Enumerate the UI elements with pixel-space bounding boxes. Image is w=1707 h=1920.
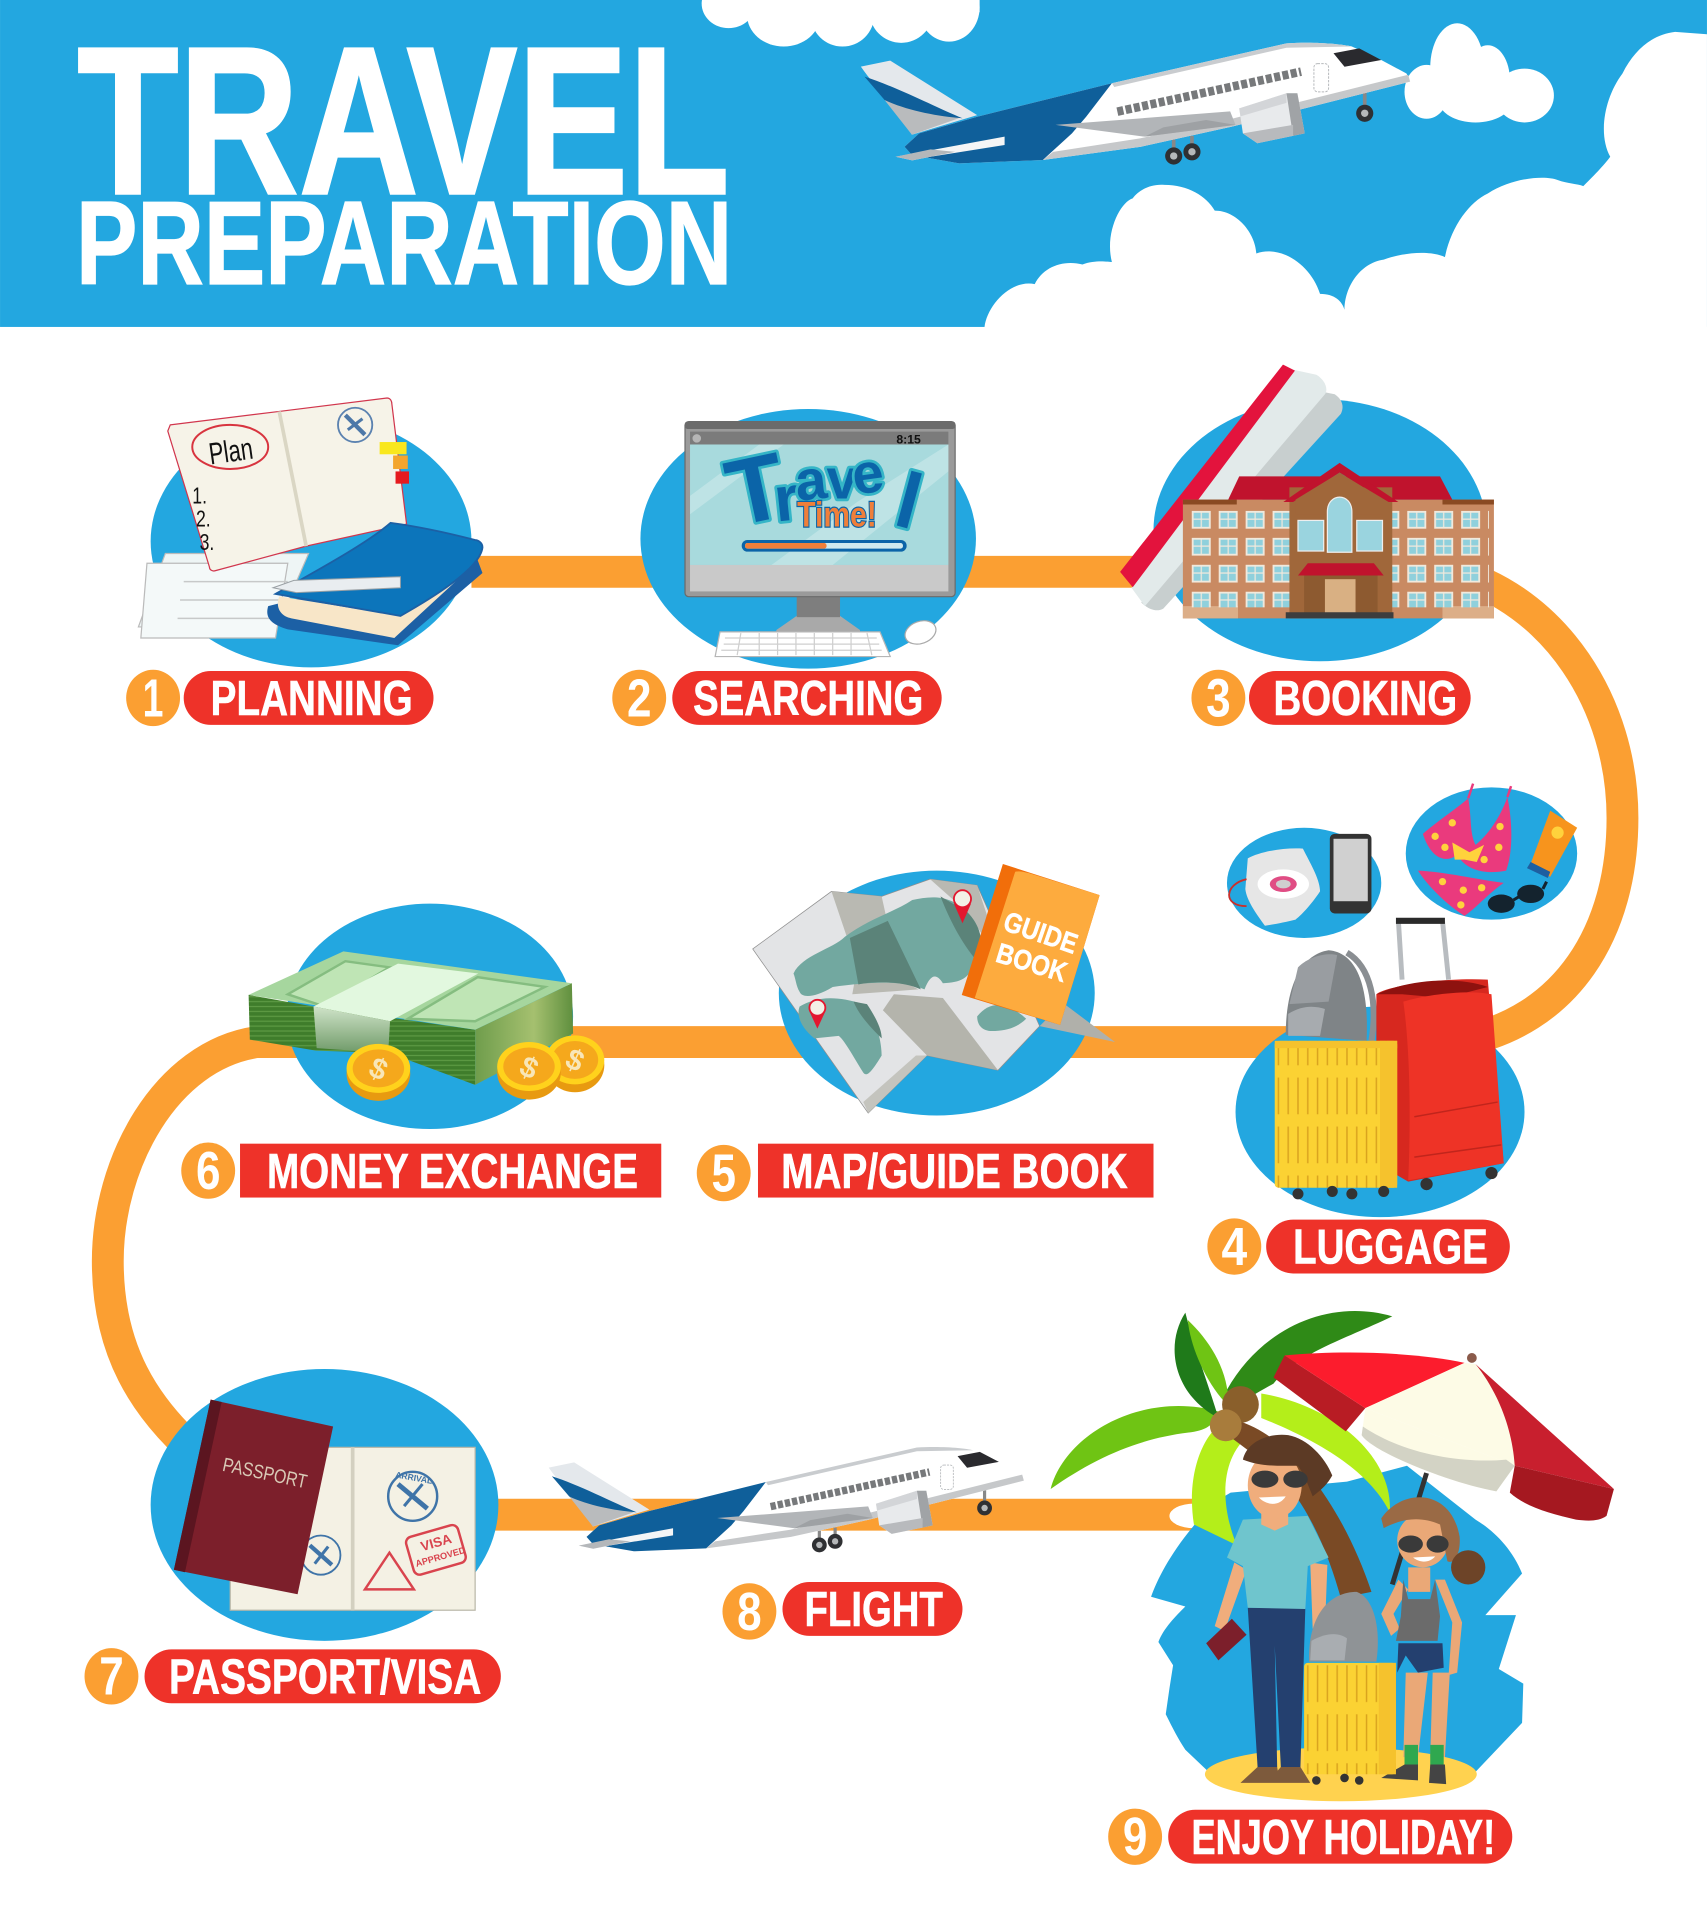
label: 8 flight [722, 1582, 962, 1642]
gold coins [347, 1035, 604, 1101]
screen logo: v [827, 447, 859, 510]
step 8: flight [549, 1447, 1024, 1642]
title [76, 2, 732, 310]
step 7: passport and visa [85, 1369, 501, 1707]
sand [1205, 1747, 1477, 1801]
label: 4 luggage: 4 [1221, 1217, 1247, 1277]
screen logo: l [887, 456, 931, 546]
airline tickets [1122, 366, 1343, 610]
red suitcase [1376, 921, 1504, 1190]
step 5: map and guide book [697, 864, 1154, 1203]
label: 9 enjoy holiday: 9 [1123, 1807, 1147, 1867]
open passport pages: VISA [419, 1531, 454, 1554]
cash bundle [249, 951, 573, 1085]
guide book [962, 864, 1100, 1025]
label: 5 map/guide book [697, 1143, 1154, 1203]
label: 2 searching: 2 [627, 668, 651, 728]
guide book: GUIDE [1000, 906, 1082, 960]
beach umbrella [1274, 1353, 1614, 1584]
red passport cover [174, 1400, 333, 1594]
red passport cover: PASSPORT [221, 1454, 309, 1493]
screen logo [717, 433, 931, 546]
label: 5 map/guide book: 5 [711, 1143, 736, 1203]
open notebook: 2. [196, 506, 211, 532]
blue circle [779, 871, 1095, 1116]
palm tree [1051, 1311, 1392, 1598]
keyboard [715, 632, 890, 657]
title: TRAVEL [77, 2, 730, 238]
woman traveller [1381, 1497, 1485, 1784]
screen logo: a [792, 447, 830, 513]
step 9: enjoy holiday [1051, 1311, 1614, 1867]
header banner [0, 0, 1707, 327]
label: 7 passport/visa: PASSPORT/VISA [169, 1650, 481, 1704]
loading bar [742, 540, 907, 552]
cloud: lower right [985, 32, 1707, 327]
screen logo: Time! [797, 495, 877, 535]
airplane illustration [861, 43, 1410, 165]
blue brush background [1151, 1466, 1523, 1772]
papers [138, 553, 309, 638]
label: 8 flight: 8 [737, 1582, 762, 1642]
label: 3 booking: 3 [1206, 668, 1231, 728]
label: 6 money exchange: MONEY EXCHANGE [267, 1145, 638, 1199]
screen logo: T [717, 433, 794, 546]
yellow suitcase [1275, 1041, 1397, 1199]
swimwear and sunscreen bubble [1406, 784, 1577, 920]
open passport pages: ARRIVAL [395, 1469, 433, 1486]
label: 3 booking [1191, 668, 1471, 728]
guide book: BOOK [993, 937, 1071, 988]
backpack [1286, 950, 1374, 1041]
blue circle [1236, 1007, 1525, 1217]
cloud: top [702, 0, 980, 47]
step 3: booking [1122, 366, 1494, 728]
label: 2 searching: SEARCHING [693, 672, 923, 726]
blue circle [640, 409, 976, 669]
label: 6 money exchange: 6 [196, 1141, 220, 1201]
label: 7 passport/visa: 7 [99, 1647, 124, 1707]
desktop computer [685, 422, 955, 657]
label: 9 enjoy holiday [1108, 1807, 1512, 1867]
label: 6 money exchange [181, 1141, 661, 1201]
label: 5 map/guide book: MAP/GUIDE BOOK [781, 1145, 1128, 1199]
open passport pages: APPROVED [414, 1545, 467, 1569]
gold coins: $ [560, 1042, 589, 1079]
label: 9 enjoy holiday: ENJOY HOLIDAY! [1191, 1811, 1495, 1865]
open notebook: 1. [192, 482, 207, 508]
title: PREPARATION [76, 177, 732, 310]
airplane illustration [549, 1447, 1024, 1552]
gold coins: $ [515, 1050, 543, 1086]
hotel building [1183, 463, 1494, 618]
label: 3 booking: BOOKING [1274, 672, 1457, 726]
gold coins: $ [364, 1051, 393, 1088]
blue circle [287, 904, 573, 1129]
mouse [902, 617, 939, 648]
label: 1 planning: PLANNING [211, 672, 413, 726]
backpack and yellow suitcase [1304, 1592, 1396, 1785]
label: 4 luggage [1207, 1217, 1510, 1277]
open passport pages [230, 1447, 475, 1610]
cloud: behind plane [1405, 23, 1554, 122]
label: 7 passport/visa [85, 1647, 501, 1707]
folded world map [753, 879, 1115, 1113]
step 4: luggage [1207, 784, 1577, 1277]
blue circle [151, 1369, 498, 1641]
step 2: searching [612, 409, 976, 728]
label: 1 planning: 1 [143, 668, 164, 728]
man traveller [1206, 1435, 1332, 1783]
blue circle [1154, 399, 1487, 661]
open notebook [168, 398, 409, 571]
camera and phone bubble [1227, 828, 1381, 938]
step 6: money exchange [181, 904, 661, 1201]
screen logo: r [770, 462, 802, 536]
step 1: planning [126, 398, 482, 728]
screen logo: e [848, 440, 887, 507]
orange route path [108, 572, 1622, 1515]
label: 2 searching [612, 668, 942, 728]
blue book with pen [267, 523, 482, 645]
small cloud at path end [1169, 1504, 1218, 1528]
desktop computer: 8:15 [896, 432, 921, 446]
label: 1 planning [126, 668, 433, 728]
open notebook: 3. [200, 529, 214, 555]
blue circle [151, 415, 471, 667]
label: 4 luggage: LUGGAGE [1293, 1221, 1488, 1275]
label: 8 flight: FLIGHT [805, 1583, 943, 1637]
open notebook: Plan [207, 432, 255, 471]
